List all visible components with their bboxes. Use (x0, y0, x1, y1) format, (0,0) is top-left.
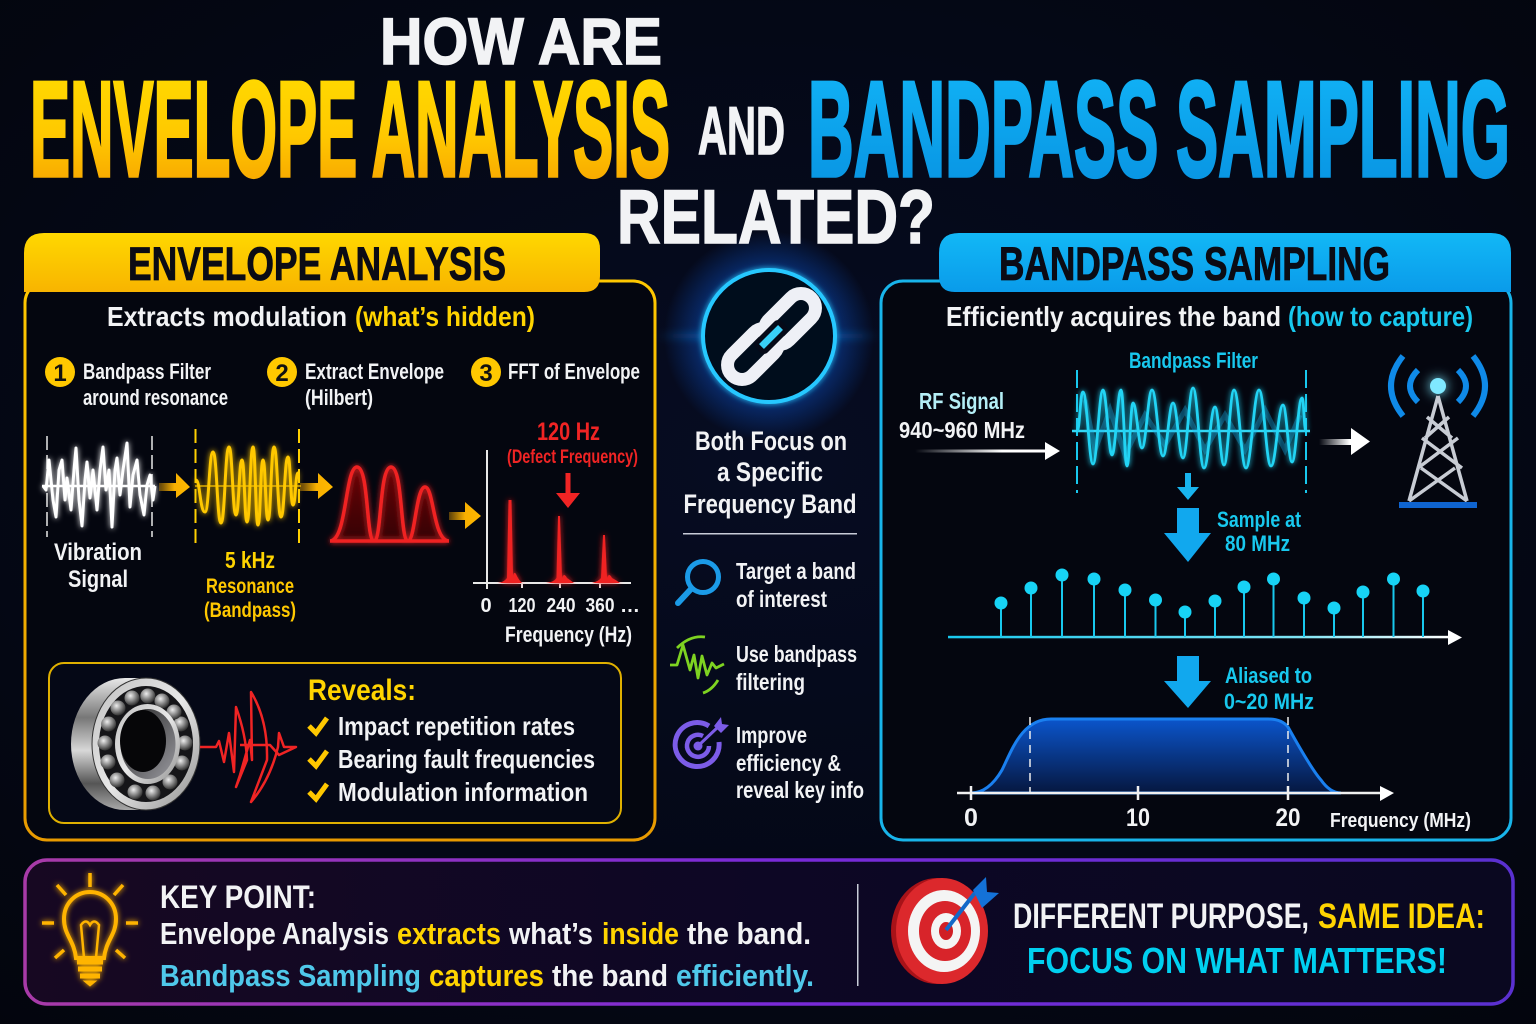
RF signal input (899, 388, 1060, 460)
key point text: the band (552, 958, 668, 993)
step 2 (267, 357, 444, 410)
icon: bullseye with dart (891, 877, 999, 984)
vibration signal waveform (42, 436, 155, 593)
resonance bandpass waveform: (Bandpass) (204, 599, 296, 622)
centre item: improve efficiency: reveal key info (736, 777, 864, 803)
centre item: target a band (678, 558, 856, 612)
reveals box: Reveals: (308, 674, 416, 707)
step 3: FFT of Envelope (508, 359, 640, 384)
title (30, 4, 1510, 260)
icon: purple target (675, 717, 729, 767)
impact signal (200, 692, 296, 802)
reveals box (49, 663, 621, 823)
step 3: 3 (479, 360, 493, 387)
key point text: efficiently. (676, 958, 814, 993)
centre heading (684, 426, 856, 519)
check list (309, 711, 595, 807)
step 2: 2 (275, 360, 289, 387)
sampled stem plot (948, 568, 1462, 645)
key point text: captures (429, 958, 544, 993)
centre item: improve efficiency (675, 717, 864, 803)
centre heading: Both Focus on (695, 426, 847, 456)
FFT spectrum chart: Frequency (Hz) (505, 622, 632, 647)
sample label: Sample at (1217, 507, 1302, 532)
FFT spectrum chart: 360 (586, 595, 614, 617)
FFT spectrum chart: 240 (546, 595, 576, 617)
vibration signal waveform: Vibration (54, 539, 142, 566)
key point text: what’s (508, 916, 593, 951)
step 1: around resonance (83, 385, 228, 410)
extracted envelope curve (330, 467, 449, 541)
defect frequency callout: 120 Hz (537, 418, 600, 446)
FFT spectrum chart (473, 450, 640, 647)
resonance bandpass waveform (195, 429, 301, 622)
defect frequency callout (507, 418, 638, 508)
subtitle: (what’s hidden) (355, 301, 535, 332)
centre item: bandpass filtering: filtering (736, 669, 805, 695)
key point text: Bandpass Sampling (160, 958, 421, 993)
title: ENVELOPE ANALYSIS (30, 53, 670, 205)
key point text (160, 879, 814, 993)
FFT spectrum chart: … (620, 595, 640, 617)
key point text: the band. (687, 916, 811, 951)
icon: radio tower (1391, 356, 1485, 508)
key point text: Envelope Analysis (160, 916, 389, 951)
step 1: Bandpass Filter (83, 359, 211, 384)
subtitle (107, 301, 535, 332)
RF signal input: 940~960 MHz (899, 417, 1025, 443)
closing statement: DIFFERENT PURPOSE, (1013, 897, 1309, 936)
step 1: 1 (53, 360, 67, 387)
aliased spectrum chart: 0 (964, 804, 978, 832)
resonance bandpass waveform: Resonance (206, 575, 294, 598)
title: AND (698, 93, 785, 169)
aliased spectrum chart: 20 (1276, 804, 1300, 832)
panel: envelope analysis (24, 233, 655, 840)
icon: green waveform (670, 637, 724, 693)
resonance bandpass waveform: 5 kHz (225, 547, 275, 573)
centre heading: Frequency Band (684, 489, 856, 519)
check list: Impact repetition rates (338, 711, 575, 741)
RF signal input: RF Signal (919, 388, 1004, 414)
heading: bandpass sampling: BANDPASS SAMPLING (999, 237, 1390, 290)
closing statement (1013, 897, 1485, 981)
heading: envelope analysis: ENVELOPE ANALYSIS (128, 237, 506, 290)
centre heading: a Specific (717, 457, 823, 487)
panel: key point (25, 860, 1513, 1004)
check list: Bearing fault frequencies (338, 744, 595, 774)
check list: Modulation information (338, 777, 588, 807)
arrow (159, 473, 190, 498)
panel: bandpass sampling (881, 233, 1511, 840)
centre item: bandpass filtering (670, 637, 857, 695)
icon: light bulb (42, 873, 138, 986)
centre item: target a band: of interest (736, 586, 827, 612)
closing statement: SAME IDEA: (1318, 897, 1485, 936)
bandpass filter waveform: Bandpass Filter (1129, 348, 1258, 373)
vibration signal waveform: Signal (68, 566, 128, 593)
subtitle: Efficiently acquires the band (946, 301, 1281, 332)
FFT spectrum chart: 120 (508, 595, 536, 617)
aliased spectrum chart: 10 (1126, 804, 1150, 832)
arrow to tower (1319, 428, 1370, 455)
sample label (1217, 507, 1302, 556)
arrow: sample down (1164, 508, 1211, 562)
icon: magnifier (678, 562, 718, 603)
alias label: 0~20 MHz (1224, 689, 1314, 714)
alias label (1224, 663, 1314, 714)
closing statement: FOCUS ON WHAT MATTERS! (1027, 940, 1447, 981)
centre item: target a band: Target a band (736, 558, 856, 584)
centre item: bandpass filtering: Use bandpass (736, 641, 857, 667)
icon: ball bearing (71, 678, 200, 810)
key point text: inside (602, 916, 679, 951)
FFT spectrum chart: 0 (480, 595, 492, 617)
step 3 (471, 357, 640, 387)
key point text: KEY POINT: (160, 879, 316, 915)
defect frequency callout: (Defect Frequency) (507, 447, 638, 468)
aliased spectrum chart (957, 717, 1471, 832)
title: RELATED? (617, 175, 935, 260)
centre item: improve efficiency: Improve (736, 722, 807, 748)
arrow (449, 502, 481, 529)
subtitle: (how to capture) (1288, 301, 1473, 332)
link icon badge (655, 231, 881, 441)
sample label: 80 MHz (1225, 531, 1290, 556)
arrow (300, 473, 333, 499)
arrow: small down (1177, 473, 1199, 500)
subtitle: Extracts modulation (107, 301, 347, 332)
key point text: extracts (397, 916, 501, 951)
step 2: (Hilbert) (305, 385, 373, 410)
arrow: alias down (1164, 656, 1211, 708)
alias label: Aliased to (1225, 663, 1312, 688)
bandpass filter waveform (1072, 348, 1310, 493)
step 1 (45, 357, 228, 410)
title: HOW ARE (380, 4, 662, 78)
step 2: Extract Envelope (305, 359, 444, 384)
aliased spectrum chart: Frequency (MHz) (1330, 810, 1471, 832)
centre item: improve efficiency: efficiency & (736, 750, 841, 776)
